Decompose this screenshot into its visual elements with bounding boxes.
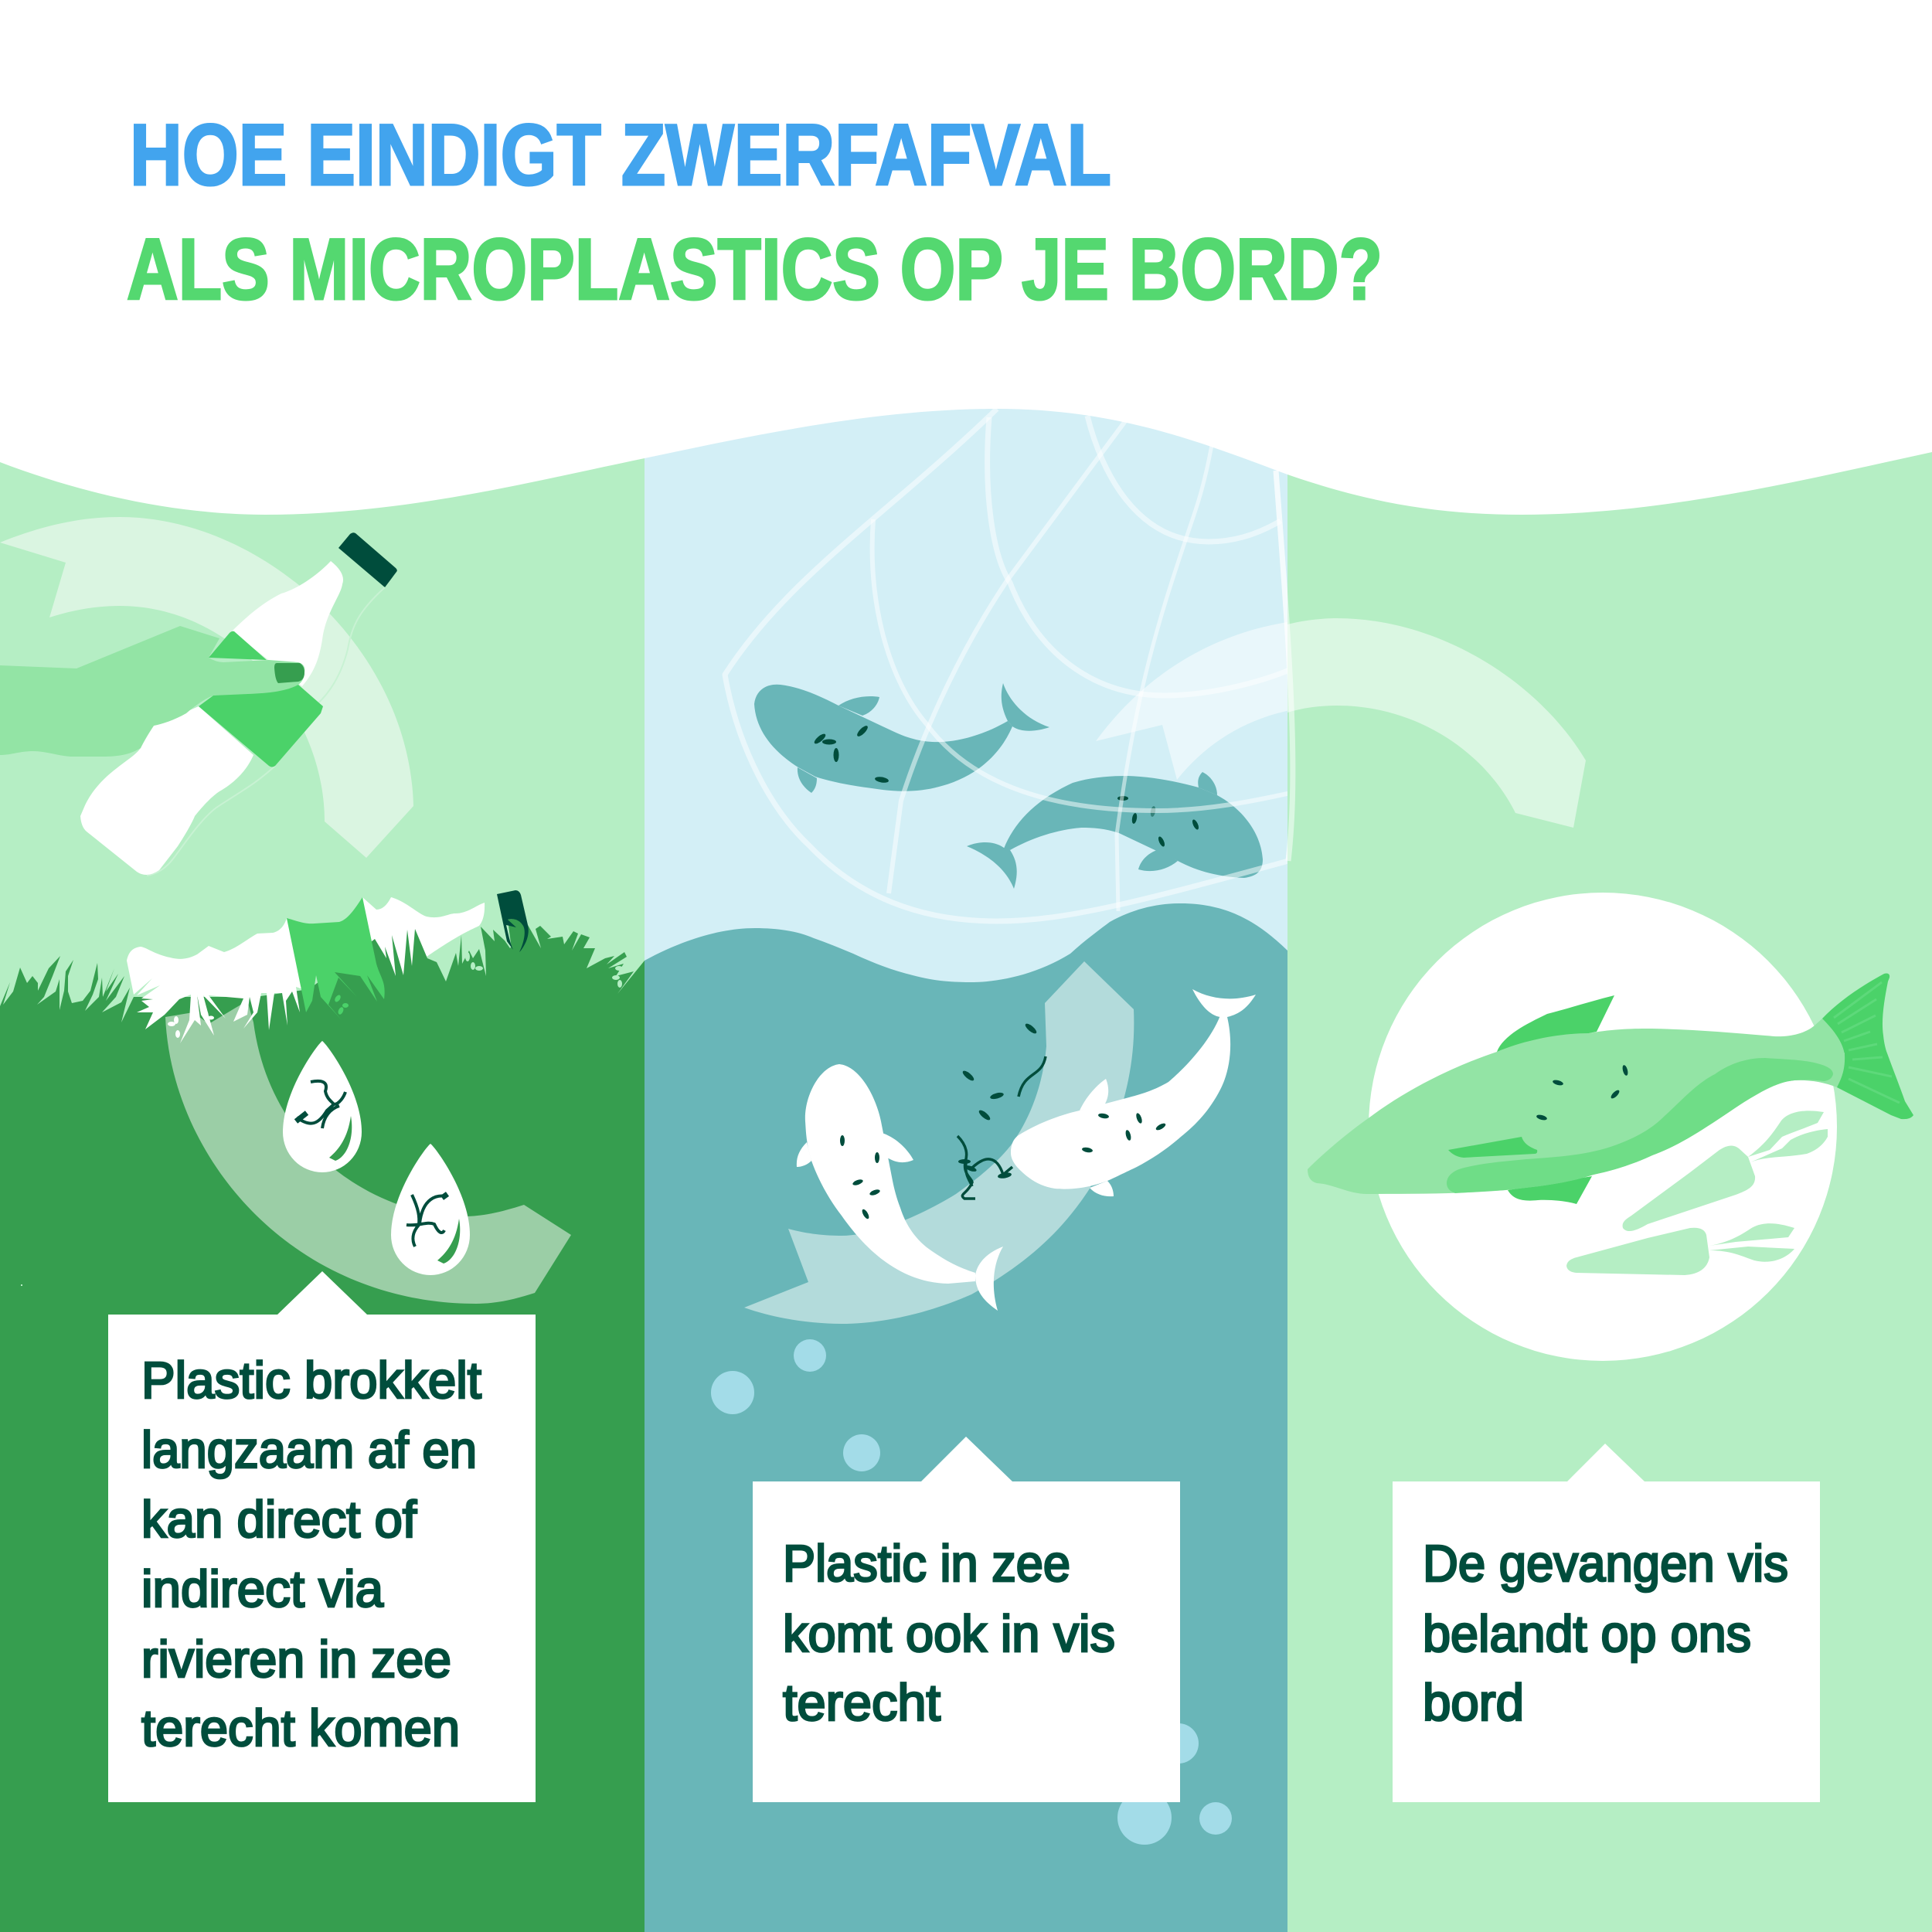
fish: white left: [797, 1064, 1003, 1311]
callout text: land: langzaam af en: [141, 1421, 477, 1479]
callout: plate: [1393, 1444, 1820, 1802]
arrow: from net to plate: [1096, 618, 1586, 828]
fish: swimming right in net: [967, 772, 1263, 889]
arrow: from sea up to net: [744, 961, 1134, 1324]
callout text: plate: bord: [1423, 1674, 1524, 1732]
callout: sea: [753, 1437, 1180, 1802]
icon: water drop with plastic 2: [391, 1144, 470, 1275]
callout: land: [108, 1271, 536, 1802]
ground with grass: [0, 925, 645, 1932]
fishing net: [725, 409, 1294, 921]
panel: plate column: [1276, 386, 1932, 1932]
icon: water drop with plastic 1: [283, 1041, 362, 1172]
callout text: plate: De gevangen vis: [1423, 1535, 1788, 1593]
decorative speck: [21, 1284, 22, 1286]
arrow: from hand to ground: [0, 517, 413, 858]
panel: sea column: [645, 386, 1586, 1932]
callout text: sea: komt ook in vis: [783, 1605, 1115, 1663]
fish: white right: [1011, 989, 1256, 1196]
header background wave: [0, 0, 1932, 515]
sea water: [645, 903, 1287, 1932]
callout text: plate: belandt op ons: [1423, 1605, 1751, 1663]
callout text: land: [141, 1352, 481, 1757]
icon: crushed bottle right end: [362, 897, 485, 997]
microplastics floating: [957, 1022, 1046, 1199]
callout text: land: terecht komen: [141, 1699, 460, 1757]
title: HOE EINDIGT ZWERFAFVAL: [130, 107, 1111, 203]
panel: land column: [0, 386, 645, 1932]
fish: swimming left in net: [754, 683, 1049, 793]
icon: hand holding bottle: [0, 532, 397, 876]
icon: carrot upper: [1623, 1111, 1828, 1231]
plate: [1369, 893, 1837, 1361]
arrow: from ground to sea: [165, 1001, 571, 1304]
callout text: land: kan direct of: [141, 1491, 417, 1549]
icon: fish on plate: [1308, 974, 1913, 1204]
callout text: land: rivieren in zee: [141, 1631, 451, 1689]
icon: crushed bottle on grass: [127, 890, 623, 1043]
title: ALS MICROPLASTICS OP JE BORD?: [127, 221, 1383, 318]
net edge over green: [1276, 471, 1293, 861]
callout text: sea: [783, 1535, 1115, 1732]
arrow: right part over green: [1287, 618, 1586, 828]
callout text: plate: [1423, 1535, 1788, 1732]
callout text: land: Plastic brokkelt: [141, 1352, 481, 1410]
callout text: sea: Plastic in zee: [783, 1535, 1070, 1593]
icon: carrot lower: [1566, 1223, 1794, 1275]
callout text: sea: terecht: [783, 1674, 940, 1732]
title: [127, 107, 1383, 318]
bubbles: [711, 1339, 1232, 1845]
callout text: land: indirect via: [141, 1560, 384, 1618]
